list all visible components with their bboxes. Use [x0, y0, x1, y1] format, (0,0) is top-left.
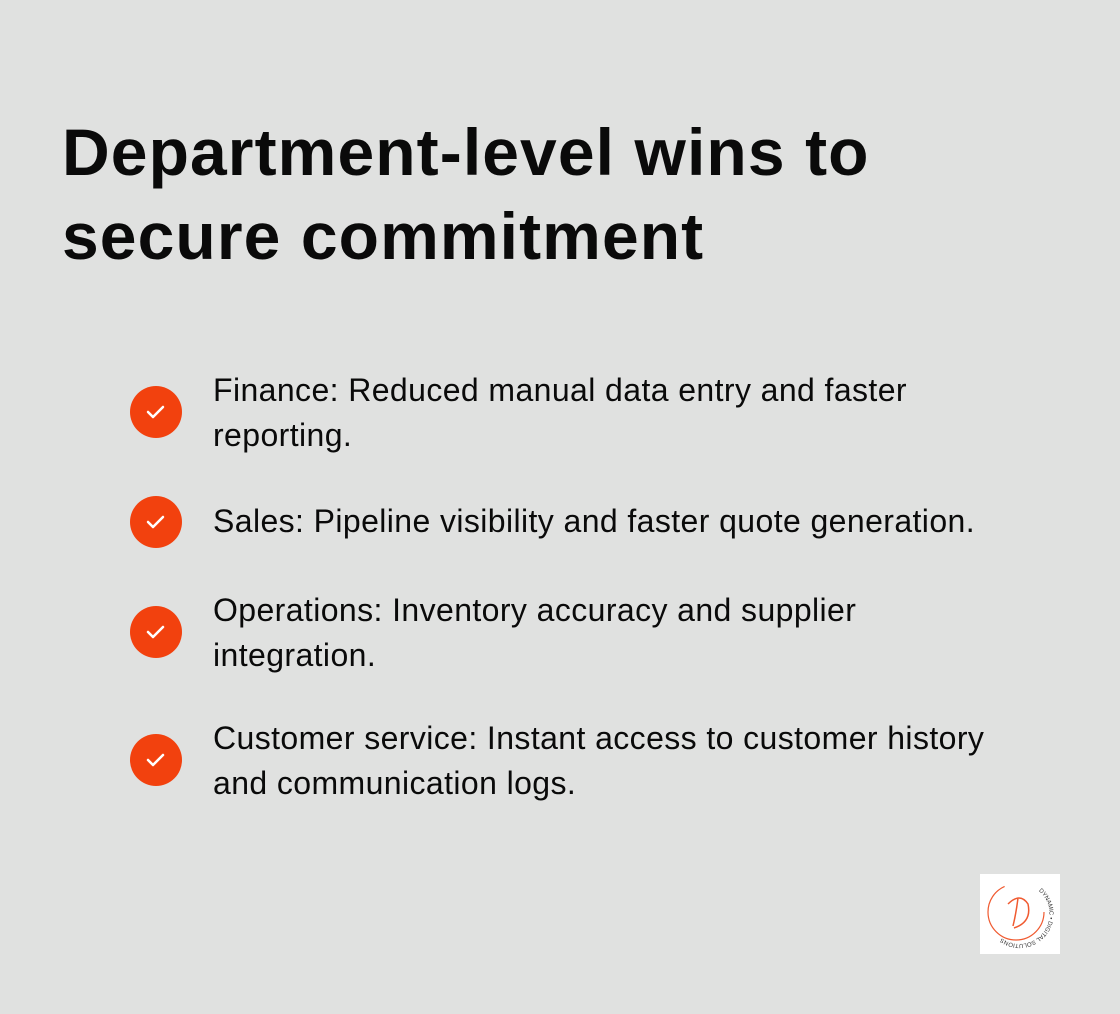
- text: Customer service: Instant access to customer history and communication logs.: [213, 720, 984, 801]
- text: Sales: Pipeline visibility and faster quote generation.: [213, 503, 975, 539]
- text: Operations: Inventory accuracy and supplier integration.: [213, 592, 856, 673]
- item: finance: [130, 372, 907, 453]
- title: [62, 115, 870, 273]
- item: operations: [130, 592, 856, 673]
- icon: check: [130, 386, 182, 438]
- text: Finance: Reduced manual data entry and faster reporting.: [213, 372, 907, 453]
- item: sales: [130, 496, 975, 548]
- title: Department-level wins to: [62, 115, 870, 189]
- icon: check: [130, 734, 182, 786]
- logo: DYNAMIC • DIGITAL SOLUTIONS: [1000, 888, 1054, 948]
- icon: check: [130, 606, 182, 658]
- item: customer service: [130, 720, 984, 801]
- logo: [980, 874, 1060, 954]
- title: secure commitment: [62, 199, 704, 273]
- icon: check: [130, 496, 182, 548]
